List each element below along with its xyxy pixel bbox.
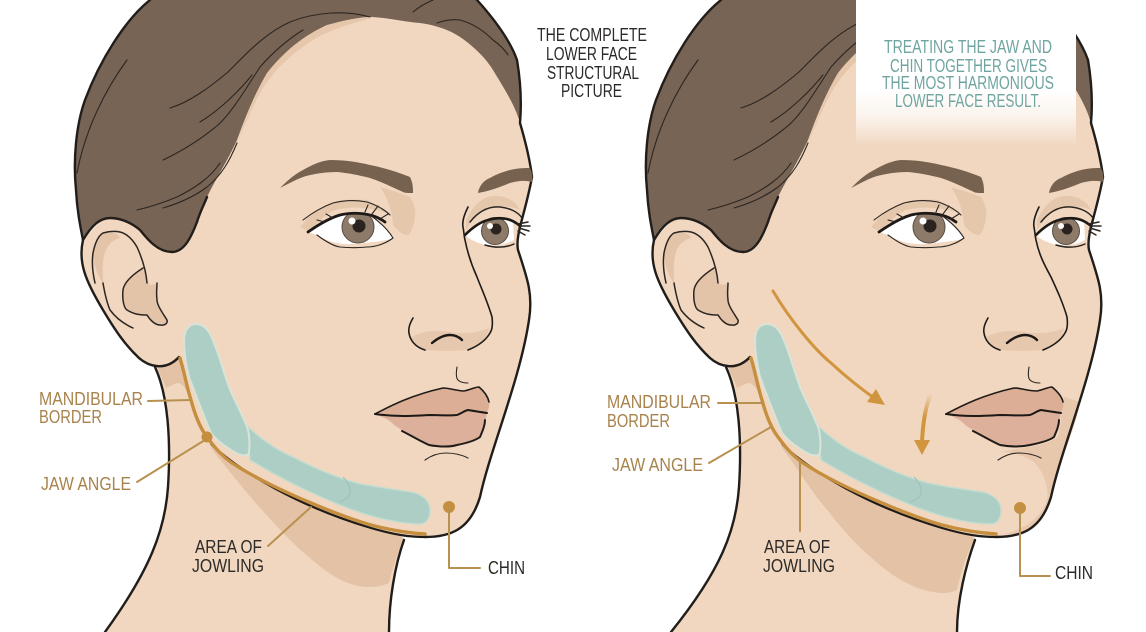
label: area of jowling, left [192,507,311,576]
icon: left eye [303,201,393,248]
label: area of jowling, right [763,462,835,576]
title: STRUCTURAL [547,63,639,83]
callout: white fade panel with text: TREATING THE JAW AND [884,37,1052,57]
label: mandibular border, left: MANDIBULAR [39,389,143,409]
title: THE COMPLETE [537,25,647,45]
chin shading [1000,397,1080,534]
label: area of jowling, left: JOWLING [192,556,264,576]
neck [671,367,975,632]
chin marker [1014,502,1026,514]
callout: white fade panel with text: CHIN TOGETHER GIVES [890,56,1047,76]
label: chin, right [1020,508,1093,583]
icon: far eye [1036,196,1101,247]
icon: left eye [874,201,964,248]
neck outline [671,367,975,632]
icon: left eyebrow [851,160,984,193]
panel: right face illustration [646,0,1103,632]
neck shadow under jaw [728,357,975,593]
hair [646,0,1092,252]
mandibular border [180,358,425,537]
title: LOWER FACE [546,44,637,64]
title: PICTURE [561,81,622,101]
icon: far eye [465,196,530,247]
mandibular border [751,358,996,537]
title [537,25,647,101]
neck [105,367,404,632]
eye socket shadow [300,187,415,235]
callout: white fade panel with text: LOWER FACE RESULT. [895,91,1041,111]
icon: far eyebrow [478,168,532,193]
jaw filler: lower teal [817,425,1001,524]
icon: far eyebrow [1049,168,1103,193]
face skin [652,0,1103,537]
arrow: downward lift direction [914,393,931,455]
label: chin, left [449,507,525,578]
label: mandibular border, left [39,389,191,427]
neck shadow under jaw [157,357,404,587]
label: mandibular border, left: BORDER [39,407,102,427]
label: jaw angle, right: JAW ANGLE [612,455,703,475]
jaw filler: upper teal [755,324,820,455]
philtrum line [425,367,468,460]
icon: lips [946,387,1063,446]
hair [75,0,521,252]
jaw filler: upper teal [184,324,250,455]
eye socket shadow [871,187,986,235]
neck outline [105,367,404,632]
callout: white fade panel with text: THE MOST HARMONIOUS [882,73,1054,93]
jaw angle marker [202,432,212,442]
icon: left eyebrow [280,160,413,193]
label: jaw angle, left: JAW ANGLE [41,474,131,494]
hairline shading [237,18,372,143]
hair strands [648,22,874,210]
callout: white fade panel with text [856,0,1076,146]
icon: nose [409,207,492,351]
chin marker [443,501,455,513]
panel: left face illustration [75,0,532,632]
label: jaw angle, right [612,427,771,475]
head outline [75,0,532,537]
label: chin, left: CHIN [488,558,525,578]
label: chin, right: CHIN [1055,563,1093,583]
philtrum line [998,367,1041,460]
label: mandibular border, right: BORDER [607,411,670,431]
icon: lips [375,387,489,446]
icon: ear [652,231,750,366]
icon: nose [984,207,1067,351]
hair strands [77,0,508,210]
hairline shading [808,18,943,143]
label: jaw angle, left [41,440,205,494]
label: mandibular border, right: MANDIBULAR [607,392,711,412]
head outline [646,0,1103,537]
filler overlap line [910,477,921,502]
label: mandibular border, right [607,392,762,431]
icon: ear [81,231,179,366]
label: area of jowling, left: AREA OF [195,537,262,557]
label: area of jowling, right: JOWLING [763,556,835,576]
arrow: cheek lift direction [773,291,885,405]
face skin [81,0,532,537]
jaw filler: lower teal [246,425,430,524]
label: area of jowling, right: AREA OF [764,537,830,557]
filler overlap line [339,477,350,502]
